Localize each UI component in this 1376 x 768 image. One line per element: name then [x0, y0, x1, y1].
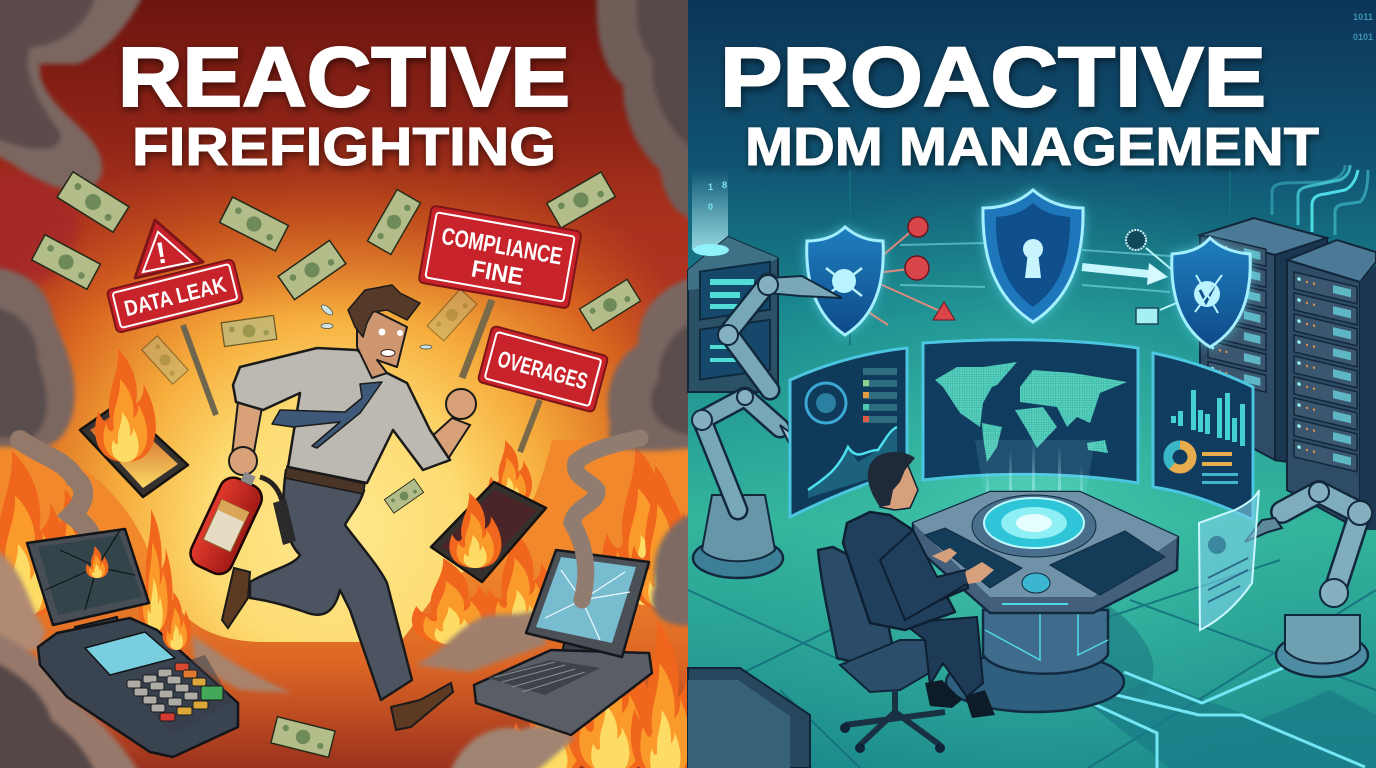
robot arm lower left [692, 389, 805, 578]
legs [903, 617, 983, 697]
smoke column left [20, 440, 94, 565]
monitor: world map [923, 340, 1138, 483]
belt [285, 466, 365, 494]
server rack right back [1200, 218, 1327, 462]
smoke clouds [0, 0, 700, 768]
flow arrows between shields [885, 243, 1170, 292]
control desk [913, 492, 1178, 712]
binary code column: 0101 [1353, 32, 1373, 42]
robot arm right [1245, 482, 1372, 677]
smoke plume from terminal [572, 438, 640, 600]
title: reactive: FIREFIGHTING [132, 117, 556, 177]
wall and floor structure [688, 170, 1376, 768]
desk keyboard panel [925, 528, 1022, 588]
tie [272, 382, 382, 448]
binary code column: 8 [722, 180, 727, 190]
sign: data leak: DATA LEAK [122, 272, 229, 321]
forearms [232, 402, 262, 455]
icon: burning tablet right [431, 440, 546, 582]
monitor: right analytics [1153, 353, 1253, 520]
holographic document [1199, 490, 1259, 630]
ground [0, 440, 688, 768]
circuit lines floor [1085, 667, 1365, 768]
title: proactive: MDM MANAGEMENT [745, 117, 1319, 177]
falling money [32, 172, 641, 757]
sign: data leak [107, 220, 243, 415]
head [880, 458, 918, 510]
icon: shield left [807, 227, 883, 335]
icon: threat markers [850, 217, 1195, 325]
boots [391, 683, 453, 730]
monitor: left dashboard [790, 348, 907, 517]
office chair [818, 547, 960, 753]
sweat drops [320, 303, 432, 349]
binary code column: 1 [708, 182, 713, 192]
title: reactive: REACTIVE [118, 30, 570, 124]
sign: data leak: ! [154, 237, 169, 271]
jacket [843, 512, 968, 630]
title: proactive [720, 30, 1319, 177]
binary code column: 0 [708, 202, 713, 212]
desk touch panel [1050, 531, 1165, 595]
icon: burning tablet left [80, 349, 188, 497]
sign: overages: OVERAGES [495, 346, 591, 394]
icon: broken desktop terminal [474, 550, 652, 735]
sign: compliance fine [418, 205, 582, 378]
panel: proactive mdm management [688, 0, 1376, 768]
icon: shield right [1172, 238, 1250, 347]
icon: broken payment terminal [27, 529, 238, 757]
foreground console bottom left [688, 668, 810, 768]
bar chart [1171, 390, 1245, 446]
character: seated manager [843, 452, 995, 718]
hands [446, 389, 476, 419]
dark floor strip [1090, 680, 1376, 768]
trousers [250, 470, 412, 700]
title: reactive [118, 30, 570, 177]
title: proactive: PROACTIVE [720, 30, 1266, 124]
fire extinguisher [186, 465, 296, 579]
sign: compliance fine: FINE [469, 255, 525, 291]
world map continents [935, 362, 1127, 462]
binary code column [692, 12, 1373, 250]
character: panicked man running [186, 285, 476, 730]
hologram beams [975, 440, 1095, 520]
server rack right front [1287, 240, 1376, 530]
sign: overages [478, 325, 608, 452]
circuit lines top right [1272, 165, 1368, 235]
shirt [233, 348, 450, 483]
keypad [127, 669, 198, 712]
robot arm upper left [718, 275, 842, 390]
panel: reactive firefighting [0, 0, 700, 768]
sign: compliance fine: COMPLIANCE [439, 223, 564, 271]
binary code column: 1011 [1353, 12, 1373, 22]
icon: shield centre with keyhole [983, 190, 1083, 322]
server rack left [688, 237, 778, 392]
flames: ground fire [0, 446, 700, 768]
face [357, 310, 407, 378]
hands [965, 562, 994, 584]
hair [348, 285, 420, 337]
